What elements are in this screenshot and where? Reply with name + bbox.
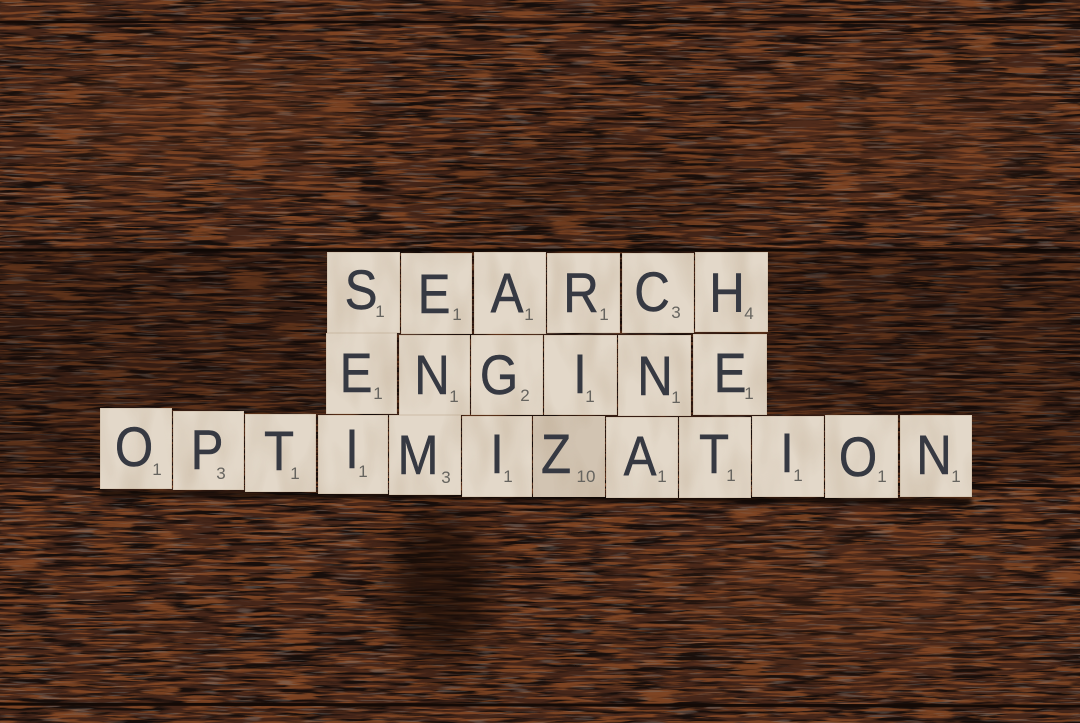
- tile: O: [825, 415, 898, 498]
- tile: C: [622, 253, 694, 333]
- tile: G: 2: [520, 386, 530, 405]
- tile: P: [173, 411, 244, 490]
- tile: I: 1: [585, 387, 595, 406]
- tile: E: [693, 334, 767, 415]
- tile: T: [679, 417, 751, 498]
- tile: A: A: [491, 262, 524, 325]
- middle plank shade: [0, 251, 1080, 477]
- tile: P: 3: [216, 464, 226, 483]
- tile: I: I: [345, 418, 359, 481]
- tile: I: I: [490, 423, 504, 486]
- tile: E: 1: [373, 384, 383, 403]
- tile: A: A: [624, 425, 657, 488]
- tile: I: I: [573, 343, 587, 406]
- tile: T: T: [264, 420, 294, 483]
- tile: N: N: [916, 424, 952, 487]
- tile: S: [327, 252, 400, 333]
- tile: E: 1: [452, 305, 462, 324]
- word: SEARCH: [327, 252, 768, 334]
- tile: Z: 10: [577, 467, 595, 486]
- dark knot area below tiles: [392, 510, 488, 660]
- tile: N: [618, 335, 691, 416]
- tile: I: [544, 335, 617, 415]
- tile shadow: [100, 490, 972, 505]
- tile: I: [318, 415, 388, 494]
- tile: M: M: [397, 424, 439, 487]
- tile: E: 1: [744, 384, 754, 403]
- tile: O: [100, 408, 172, 489]
- tile: A: 1: [524, 305, 534, 324]
- tile: C: C: [634, 261, 670, 324]
- tile: A: [606, 417, 678, 498]
- tile: I: [752, 416, 824, 497]
- tile: E: [326, 333, 397, 414]
- tile: N: N: [637, 345, 673, 408]
- tile: S: S: [345, 259, 377, 322]
- tile: T: 1: [726, 466, 736, 485]
- tile: H: H: [709, 262, 745, 325]
- tile: A: 1: [657, 467, 667, 486]
- tile: O: 1: [877, 467, 887, 486]
- tile: T: [245, 414, 316, 492]
- tile: I: I: [780, 422, 794, 485]
- tile: O: O: [839, 426, 877, 489]
- tile: M: [389, 415, 461, 495]
- tile: N: [399, 335, 470, 415]
- tile: E: E: [714, 342, 746, 405]
- tile: N: 1: [951, 467, 961, 486]
- tile: R: [547, 253, 620, 333]
- tile: A: [474, 252, 546, 334]
- tile: N: N: [414, 344, 450, 407]
- tile: P: P: [191, 419, 223, 482]
- tile: N: 1: [449, 387, 459, 406]
- tile: I: 1: [793, 466, 803, 485]
- tile: O: 1: [152, 460, 162, 479]
- tile: N: [900, 415, 972, 497]
- word: OPTIMIZATION: [100, 408, 972, 498]
- tile: I: 1: [503, 467, 513, 486]
- tile: G: G: [480, 344, 518, 407]
- tile: O: O: [115, 416, 153, 479]
- tile: T: 1: [290, 464, 300, 483]
- tile: S: 1: [375, 302, 385, 321]
- tile: E: E: [418, 263, 450, 326]
- tile: C: 3: [671, 303, 681, 322]
- tile: H: 4: [744, 304, 754, 323]
- tile: R: R: [563, 262, 599, 325]
- word: ENGINE: [326, 333, 767, 416]
- tile: M: 3: [441, 468, 451, 487]
- tile: E: [401, 253, 472, 334]
- tile: I: [462, 416, 532, 497]
- tile: G: [471, 335, 543, 415]
- tile: I: 1: [358, 462, 368, 481]
- tile: H: [695, 252, 768, 332]
- tile: E: E: [340, 342, 372, 405]
- tile: R: 1: [599, 305, 609, 324]
- tile: N: 1: [671, 388, 681, 407]
- tile: Z: [533, 416, 605, 497]
- tile: T: T: [699, 423, 729, 486]
- tile: Z: Z: [541, 423, 571, 486]
